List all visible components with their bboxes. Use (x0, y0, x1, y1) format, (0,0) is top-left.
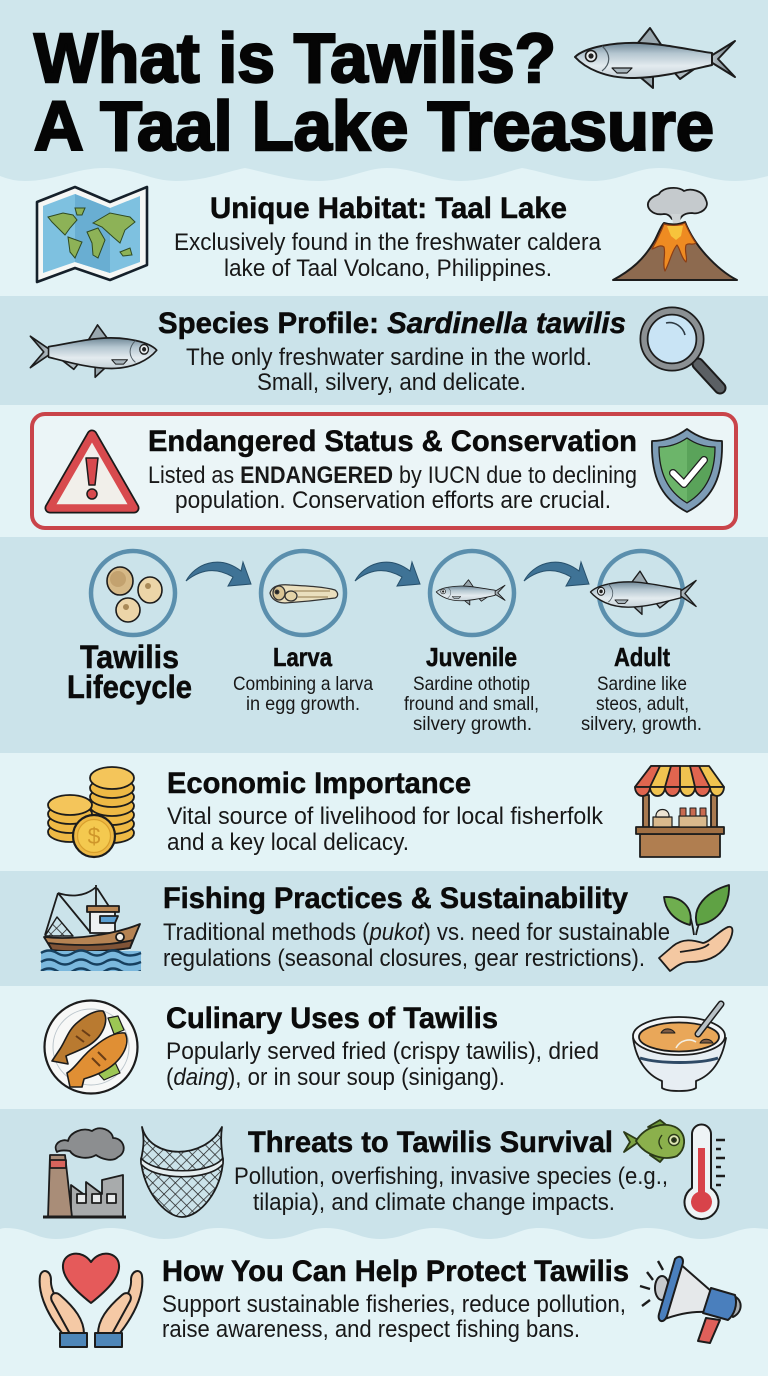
icon: hands holding heart (40, 1254, 142, 1347)
heading: culinary uses: Culinary Uses of Tawilis (166, 1002, 498, 1035)
heading: species profile: Species Profile: Sardinella tawilis (158, 307, 626, 340)
panel: fishing practices (0, 871, 768, 986)
heading: economic importance: Economic Importance (167, 767, 471, 800)
text: larva stage: in egg growth. (246, 693, 360, 715)
icon: larva (270, 585, 338, 603)
text: adult stage: Adult (614, 642, 670, 672)
text: fishing description (163, 919, 670, 972)
text: fishing description: regulations (seasonal closures, gear restrictions). (163, 945, 645, 972)
text: endangered description (148, 462, 637, 514)
text: how you can help description: raise awareness, and respect fishing bans. (162, 1316, 580, 1343)
text: economic description (167, 803, 604, 856)
icon: megaphone (640, 1257, 741, 1343)
title (34, 19, 714, 165)
icon: factory with smoke (43, 1128, 126, 1217)
icon: invasive green fish (624, 1120, 684, 1162)
icon: gold coins: $ (88, 823, 101, 849)
arrow: eggs to larva (186, 562, 251, 586)
panel: culinary uses (0, 986, 768, 1109)
icon: plant in hand (659, 885, 732, 971)
icon: adult fish (590, 571, 696, 614)
icon: volcano (613, 188, 737, 280)
lifecycle rings (91, 551, 683, 635)
text: larva stage (233, 642, 373, 715)
text: larva stage: Larva (273, 642, 332, 672)
text: threats description (234, 1163, 668, 1216)
icon: eggs (107, 567, 162, 622)
icon: juvenile fish (436, 580, 505, 605)
text: unique habitat description: lake of Taal Volcano, Philippines. (224, 255, 552, 282)
text: culinary description: (daing), or in sour soup (sinigang). (166, 1064, 505, 1091)
heading: how you can help: How You Can Help Protect Tawilis (162, 1255, 629, 1288)
text: endangered description: population. Conservation efforts are crucial. (175, 487, 611, 514)
text: culinary description: Popularly served fried (crispy tawilis), dried (166, 1038, 599, 1065)
panel: economic importance (0, 753, 768, 871)
heading: unique habitat: Unique Habitat: Taal Lake (210, 192, 567, 225)
arrow: larva to juvenile (355, 562, 420, 586)
text: endangered description: Listed as ENDANGERED by IUCN due to declining (148, 462, 637, 489)
icon: market stall (635, 766, 724, 857)
heading: threats: Threats to Tawilis Survival (248, 1126, 613, 1159)
text: unique habitat description: Exclusively found in the freshwater caldera (174, 229, 602, 256)
text: juvenile stage: silvery growth. (413, 713, 532, 735)
text: species description (186, 344, 592, 396)
heading: tawilis lifecycle: Lifecycle (67, 669, 192, 705)
text: adult stage (581, 642, 702, 735)
text: juvenile stage: fround and small, (404, 693, 539, 715)
icon: gold coins (48, 767, 134, 857)
text: unique habitat description (174, 229, 602, 282)
panel: endangered status (0, 405, 768, 537)
text: species description: The only freshwater sardine in the world. (186, 344, 592, 371)
icon: fishing net (141, 1127, 223, 1217)
text: juvenile stage (404, 642, 539, 735)
arrow: juvenile to adult (524, 562, 589, 586)
text: species description: Small, silvery, and delicate. (257, 369, 526, 396)
text: adult stage: Sardine like (597, 673, 687, 695)
text: fishing description: Traditional methods (pukot) vs. need for sustainable (163, 919, 670, 946)
panel: tawilis lifecycle (0, 537, 768, 753)
text: culinary description (166, 1038, 599, 1091)
heading: endangered status: Endangered Status & Conservation (148, 425, 637, 458)
text: juvenile stage: Juvenile (426, 642, 517, 672)
heading: tawilis lifecycle (67, 639, 192, 705)
text: economic description: Vital source of livelihood for local fisherfolk (167, 803, 604, 830)
text: how you can help description: Support sustainable fisheries, reduce pollution, (162, 1291, 626, 1318)
text: juvenile stage: Sardine othotip (413, 673, 530, 695)
text: adult stage: silvery, growth. (581, 713, 702, 735)
text: adult stage: steos, adult, (596, 693, 689, 715)
icon: thermometer (684, 1124, 725, 1219)
icon: shield with check (652, 429, 722, 512)
text: threats description: tilapia), and climate change impacts. (253, 1189, 615, 1216)
panel: unique habitat (0, 168, 768, 296)
text: threats description: Pollution, overfishing, invasive species (e.g., (234, 1163, 668, 1190)
icon: species fish (30, 325, 157, 377)
icon: fishing boat (38, 885, 144, 975)
title: What is Tawilis? (34, 19, 556, 97)
heading: tawilis lifecycle: Tawilis (80, 639, 179, 675)
text: economic description: and a key local delicacy. (167, 829, 409, 856)
panel: species profile (0, 296, 768, 405)
icon: soup bowl (633, 1004, 726, 1091)
text: larva stage: Combining a larva (233, 673, 373, 695)
heading: fishing practices: Fishing Practices & Sustainability (163, 882, 628, 915)
icon: world map (37, 187, 147, 282)
icon: warning triangle (50, 435, 134, 508)
icon: plate of fried fish (44, 1000, 138, 1094)
title: A Taal Lake Treasure (34, 87, 714, 165)
icon: magnifying glass (644, 311, 720, 388)
panel: threats (0, 1109, 768, 1240)
text: how you can help description (162, 1291, 626, 1343)
icon: title fish (575, 28, 735, 88)
panel: how you can help (0, 1228, 768, 1376)
